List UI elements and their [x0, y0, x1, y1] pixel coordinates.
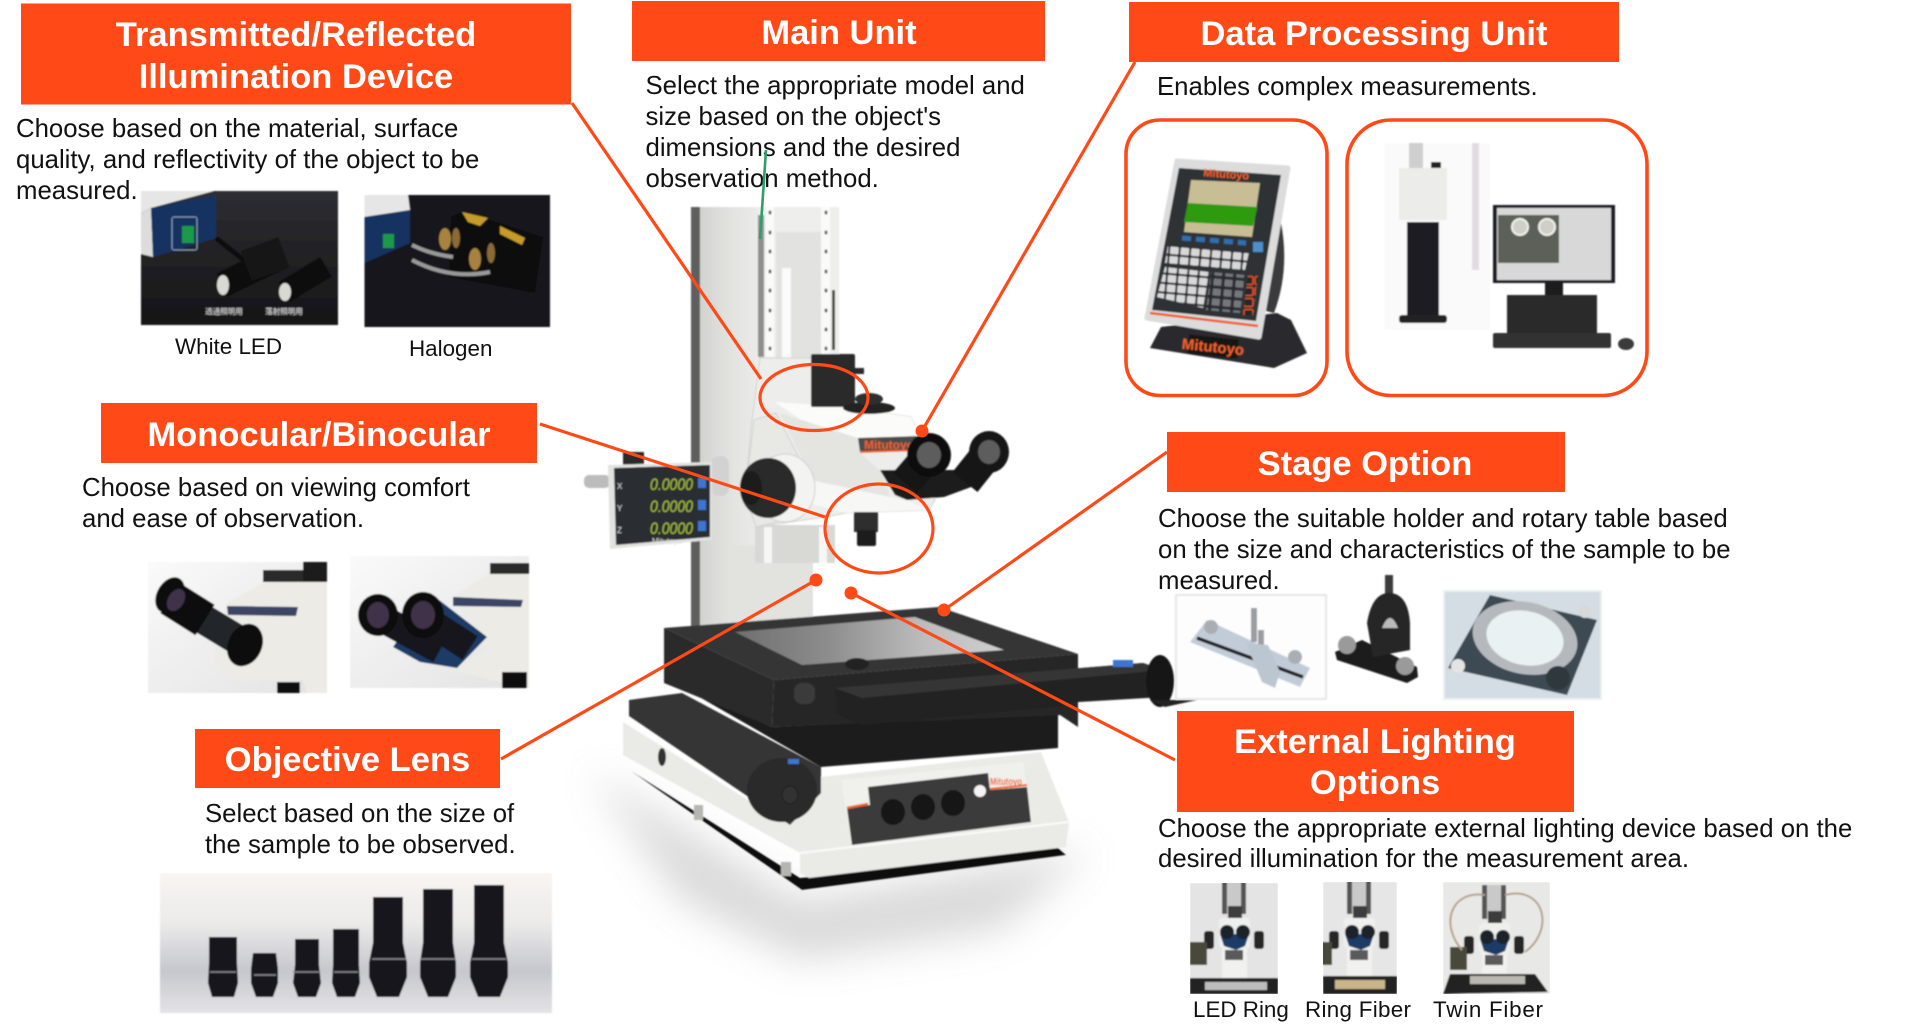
circle: illumination: [760, 364, 868, 430]
heading: Illumination Device: [139, 58, 453, 96]
lower carriage: [755, 525, 835, 563]
marker: stage: [938, 604, 950, 616]
heading: [1129, 2, 1619, 62]
photo: objective lenses: [160, 873, 552, 1013]
caption: LED ring: LED Ring: [1193, 997, 1289, 1022]
heading: [1177, 711, 1574, 812]
heading: Main Unit: [761, 14, 917, 52]
photo: white LED: 落射照明用: [265, 306, 303, 316]
photo: white LED: 透過照明用: [205, 306, 243, 316]
description: measured.: [1158, 567, 1280, 595]
focus knob: [740, 454, 815, 522]
caption: white LED: White LED: [175, 334, 282, 359]
panel: stage option: [1158, 432, 1731, 699]
photo: halogen: [364, 195, 550, 327]
line: illumination to head: [572, 103, 761, 379]
digital readout panel: Y: [617, 504, 623, 513]
y-axis rail and handwheel: [629, 693, 821, 825]
description: Select the appropriate model and: [646, 72, 1025, 100]
heading: [101, 403, 537, 463]
floor shadow: [590, 770, 1090, 960]
caption: halogen: Halogen: [409, 336, 492, 361]
description: quality, and reflectivity of the object to be: [16, 146, 479, 174]
heading: Monocular/Binocular: [147, 416, 491, 454]
frame: PC system: [1347, 120, 1647, 396]
description: Select based on the size of: [205, 800, 515, 828]
column: [691, 207, 839, 627]
panel: objective lens: [160, 729, 552, 1013]
description: Choose the suitable holder and rotary table based: [1158, 505, 1728, 533]
caption: twin fiber: Twin Fiber: [1433, 997, 1544, 1022]
description: Choose based on the material, surface: [16, 115, 458, 143]
panel: main unit: [632, 1, 1045, 193]
description: observation method.: [646, 165, 879, 193]
digital readout panel: 0.0000: [650, 475, 693, 494]
description: on the size and characteristics of the sample to be: [1158, 536, 1731, 564]
caption: ring fiber: Ring Fiber: [1305, 997, 1412, 1022]
heading: Stage Option: [1258, 445, 1472, 483]
description: dimensions and the desired: [646, 134, 960, 162]
head body: [745, 354, 935, 527]
heading: [632, 1, 1045, 61]
frame: controller: Mitutoyo: [1203, 167, 1250, 183]
base: Mitutoyo: [990, 777, 1022, 788]
heading: Data Processing Unit: [1200, 15, 1548, 53]
objective under head: [854, 512, 878, 546]
photo: white LED: [141, 191, 338, 325]
description: Enables complex measurements.: [1157, 73, 1538, 101]
heading: Transmitted/Reflected: [116, 16, 476, 54]
line: monocular to eyepiece port: [540, 424, 825, 517]
base: [623, 722, 1069, 890]
frame: controller: Mitutoyo: [1181, 336, 1245, 359]
description: Choose based on viewing comfort: [82, 474, 470, 502]
callout lines and markers: [501, 62, 1175, 760]
green stray line: [760, 150, 766, 239]
photo: twin fiber: [1443, 882, 1550, 994]
heading: Options: [1310, 764, 1440, 802]
digital readout panel: X: [617, 482, 623, 491]
digital readout panel: [584, 452, 729, 549]
panel: external lighting options: [1158, 711, 1852, 1022]
digital readout panel: 0.0000: [650, 497, 693, 516]
heading: Objective Lens: [225, 741, 470, 779]
xy stage: [664, 607, 1197, 767]
description: desired illumination for the measurement area.: [1158, 845, 1689, 873]
heading: [21, 4, 571, 104]
photo: ring fiber: [1323, 882, 1397, 994]
frame: controller: [1126, 120, 1327, 396]
panel: data processing unit: [1126, 2, 1647, 396]
description: size based on the object's: [646, 103, 941, 131]
marker: objective: [810, 574, 822, 586]
photo: holder clamp: [1176, 595, 1326, 699]
line: objective: [501, 580, 816, 759]
photo: monocular: [148, 562, 327, 693]
microscope main unit: [584, 207, 1197, 960]
photo: binocular: [350, 556, 529, 688]
panel: transmitted/reflected illumination device: [16, 4, 571, 361]
description: and ease of observation.: [82, 505, 364, 533]
panel: monocular/binocular: [82, 403, 537, 693]
line: stage: [944, 452, 1167, 610]
binocular eyepieces: [880, 431, 1009, 500]
photo: v-block holder: [1335, 575, 1418, 683]
head body: Mitutoyo: [864, 438, 914, 452]
digital readout panel: 0.0000: [650, 519, 693, 538]
marker: external lighting: [844, 586, 858, 600]
line: external lighting: [851, 593, 1175, 760]
heading: [195, 729, 500, 788]
photo: rotary table: [1444, 591, 1601, 699]
digital readout panel: Z: [617, 526, 622, 535]
heading: External Lighting: [1234, 723, 1516, 761]
description: Choose the appropriate external lighting device based on the: [1158, 815, 1852, 843]
photo: LED ring: [1190, 880, 1278, 994]
circle: eyepiece port: [825, 484, 933, 573]
description: the sample to be observed.: [205, 831, 516, 859]
line: data unit: [922, 62, 1135, 431]
description: measured.: [16, 177, 138, 205]
heading: [1167, 432, 1565, 492]
digital readout panel: Mitutoyo: [652, 537, 683, 546]
marker: data unit: [916, 424, 928, 438]
